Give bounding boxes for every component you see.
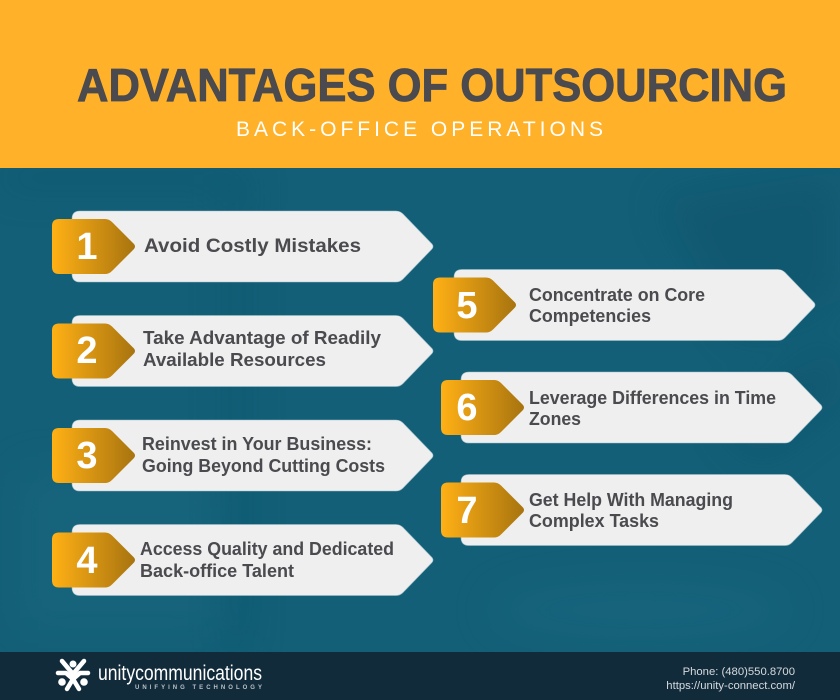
item 1 [52,211,433,282]
item 2 [52,316,433,386]
contact details [666,666,796,692]
item 7: Complex Tasks [529,510,659,531]
item 6: Leverage Differences in Time [529,387,776,408]
item 5: Competencies [529,305,651,326]
logo tagline: UNIFYING TECHNOLOGY [135,685,262,691]
item 5: Concentrate on Core [529,284,705,305]
item 6 [441,372,822,443]
item 4: Back-office Talent [140,560,294,581]
contact details: Phone: (480)550.8700 [683,666,795,678]
logo wordmark: unitycommunications [98,662,262,685]
item 4 [52,524,433,596]
item 3: 3 [76,435,98,477]
item 6: 6 [456,387,478,429]
header band [0,0,840,168]
title: ADVANTAGES OF OUTSOURCING [77,59,787,111]
item 7 [441,474,822,546]
contact details: https://unity-connect.com/ [666,680,796,692]
item 7: 7 [456,490,478,532]
item 4: Access Quality and Dedicated [140,538,394,559]
footer [0,652,840,700]
item 5: 5 [456,285,478,327]
icon: unity logo [58,660,88,689]
item 2: Available Resources [143,349,326,370]
item 4: 4 [76,540,98,582]
item 3: Going Beyond Cutting Costs [142,455,385,476]
item 5 [433,270,815,340]
item 2: Take Advantage of Readily [143,327,382,348]
item 3 [52,420,433,491]
item 1: Avoid Costly Mistakes [144,235,361,257]
item 1: 1 [76,226,98,268]
item 7: Get Help With Managing [529,489,733,510]
item 6: Zones [529,408,581,429]
background panel [0,168,840,653]
item 2: 2 [76,330,98,372]
item 3: Reinvest in Your Business: [142,433,372,454]
subtitle: BACK-OFFICE OPERATIONS [236,118,603,141]
